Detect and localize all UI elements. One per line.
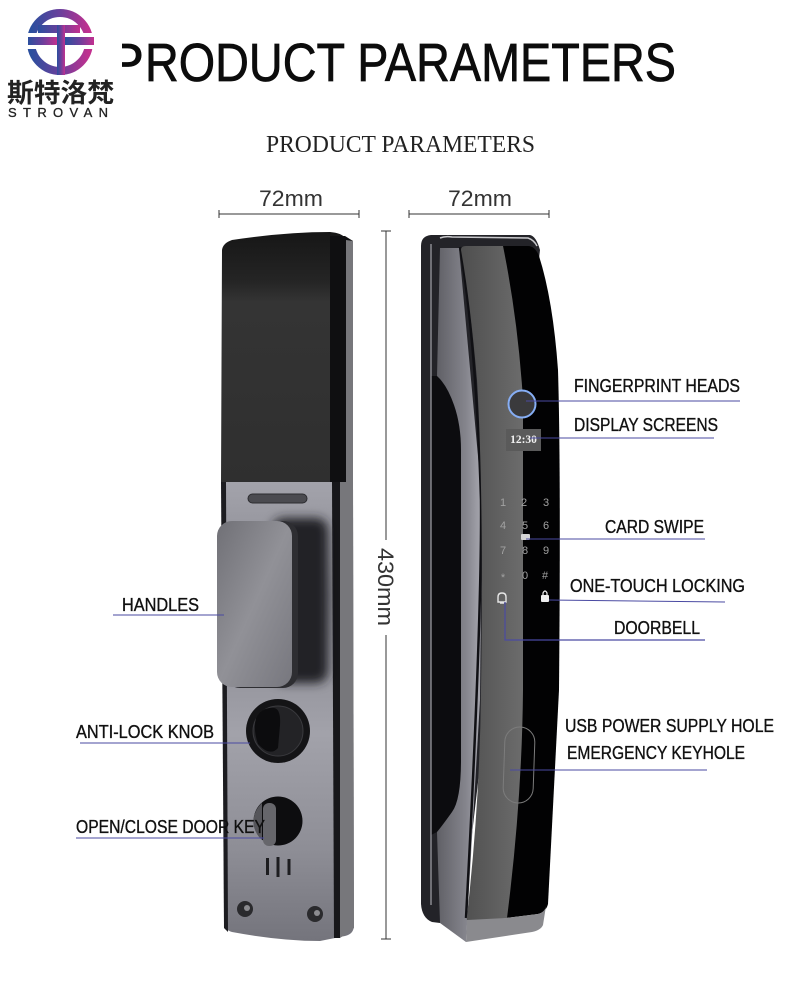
- logo: STROVAN brand mark: STROVAN: [8, 105, 108, 120]
- callout: card swipe: CARD SWIPE: [605, 517, 704, 537]
- left edge: [221, 482, 228, 932]
- side rail: [340, 482, 354, 938]
- vents: [268, 857, 289, 877]
- handle shadow: [272, 518, 328, 683]
- callout: handles: HANDLES: [122, 595, 199, 615]
- back rail: [421, 235, 540, 923]
- thin highlight: [430, 244, 432, 905]
- silver side: [437, 248, 482, 942]
- page title: RODUCT PARAMETERS: [145, 33, 676, 93]
- side view of lock: [421, 235, 560, 942]
- callout: emergency keyhole: EMERGENCY KEYHOLE: [567, 743, 745, 763]
- keypad: 3: [543, 497, 549, 509]
- dimension: side width 72mm: 72mm: [448, 186, 512, 211]
- fingerprint sensor: [508, 390, 536, 418]
- dimension: height 430mm: [373, 231, 398, 939]
- dimension: height 430mm: 430mm: [373, 548, 398, 626]
- divider line: [460, 247, 481, 918]
- keypad: 9: [543, 545, 549, 557]
- keypad: *: [501, 572, 506, 584]
- black top panel: [221, 232, 353, 482]
- anti-lock knob: [246, 699, 310, 763]
- callout: display screens: DISPLAY SCREENS: [574, 415, 718, 435]
- keypad: #: [542, 570, 549, 582]
- callout: one-touch locking: ONE-TOUCH LOCKING: [570, 576, 745, 596]
- bright top trim: [440, 237, 537, 246]
- logo: STROVAN brand mark: 斯特洛梵: [7, 73, 114, 110]
- grey face: [461, 246, 523, 923]
- top panel side shading: [330, 236, 353, 482]
- callout: fingerprint heads: FINGERPRINT HEADS: [574, 376, 740, 396]
- keypad: 5: [522, 520, 528, 532]
- display screen: [506, 429, 541, 451]
- door key: [254, 796, 302, 846]
- callout: doorbell: [505, 602, 705, 640]
- keypad: 1: [500, 497, 506, 509]
- dark edge: [332, 482, 340, 938]
- emergency keyhole cover: [503, 726, 535, 804]
- dimension: front width 72mm: [219, 186, 359, 218]
- keypad: 0: [522, 570, 528, 582]
- sensor slot: [248, 494, 307, 503]
- callout: open/close door key: OPEN/CLOSE DOOR KEY: [76, 817, 265, 837]
- keypad: [500, 497, 549, 584]
- black grip recess: [431, 376, 461, 835]
- keypad: 4: [500, 520, 506, 532]
- keypad: 8: [522, 545, 528, 557]
- display screen: 12:30: [510, 434, 537, 446]
- keypad: 2: [521, 497, 527, 509]
- dimension: front width 72mm: 72mm: [259, 186, 323, 211]
- handle edge: [225, 521, 298, 688]
- lock body plate: [222, 480, 354, 941]
- subtitle: PRODUCT PARAMETERS: [266, 132, 535, 158]
- dimension: side width 72mm: [409, 186, 549, 218]
- icon: card swipe: [521, 534, 530, 540]
- grey right strip: [346, 240, 353, 482]
- keypad: 7: [500, 545, 506, 557]
- icon: doorbell: [498, 593, 506, 603]
- metal base: [466, 906, 546, 942]
- callout: doorbell: DOORBELL: [614, 618, 700, 638]
- callout: anti-lock knob: ANTI-LOCK KNOB: [76, 722, 214, 742]
- black face: [500, 246, 560, 918]
- icon: lock: [541, 591, 549, 602]
- screws: [237, 901, 323, 922]
- logo: STROVAN brand mark: [0, 0, 122, 125]
- page title: P: [108, 33, 144, 93]
- keypad: 6: [543, 520, 549, 532]
- handle: [217, 521, 292, 687]
- front view of lock: [217, 232, 354, 941]
